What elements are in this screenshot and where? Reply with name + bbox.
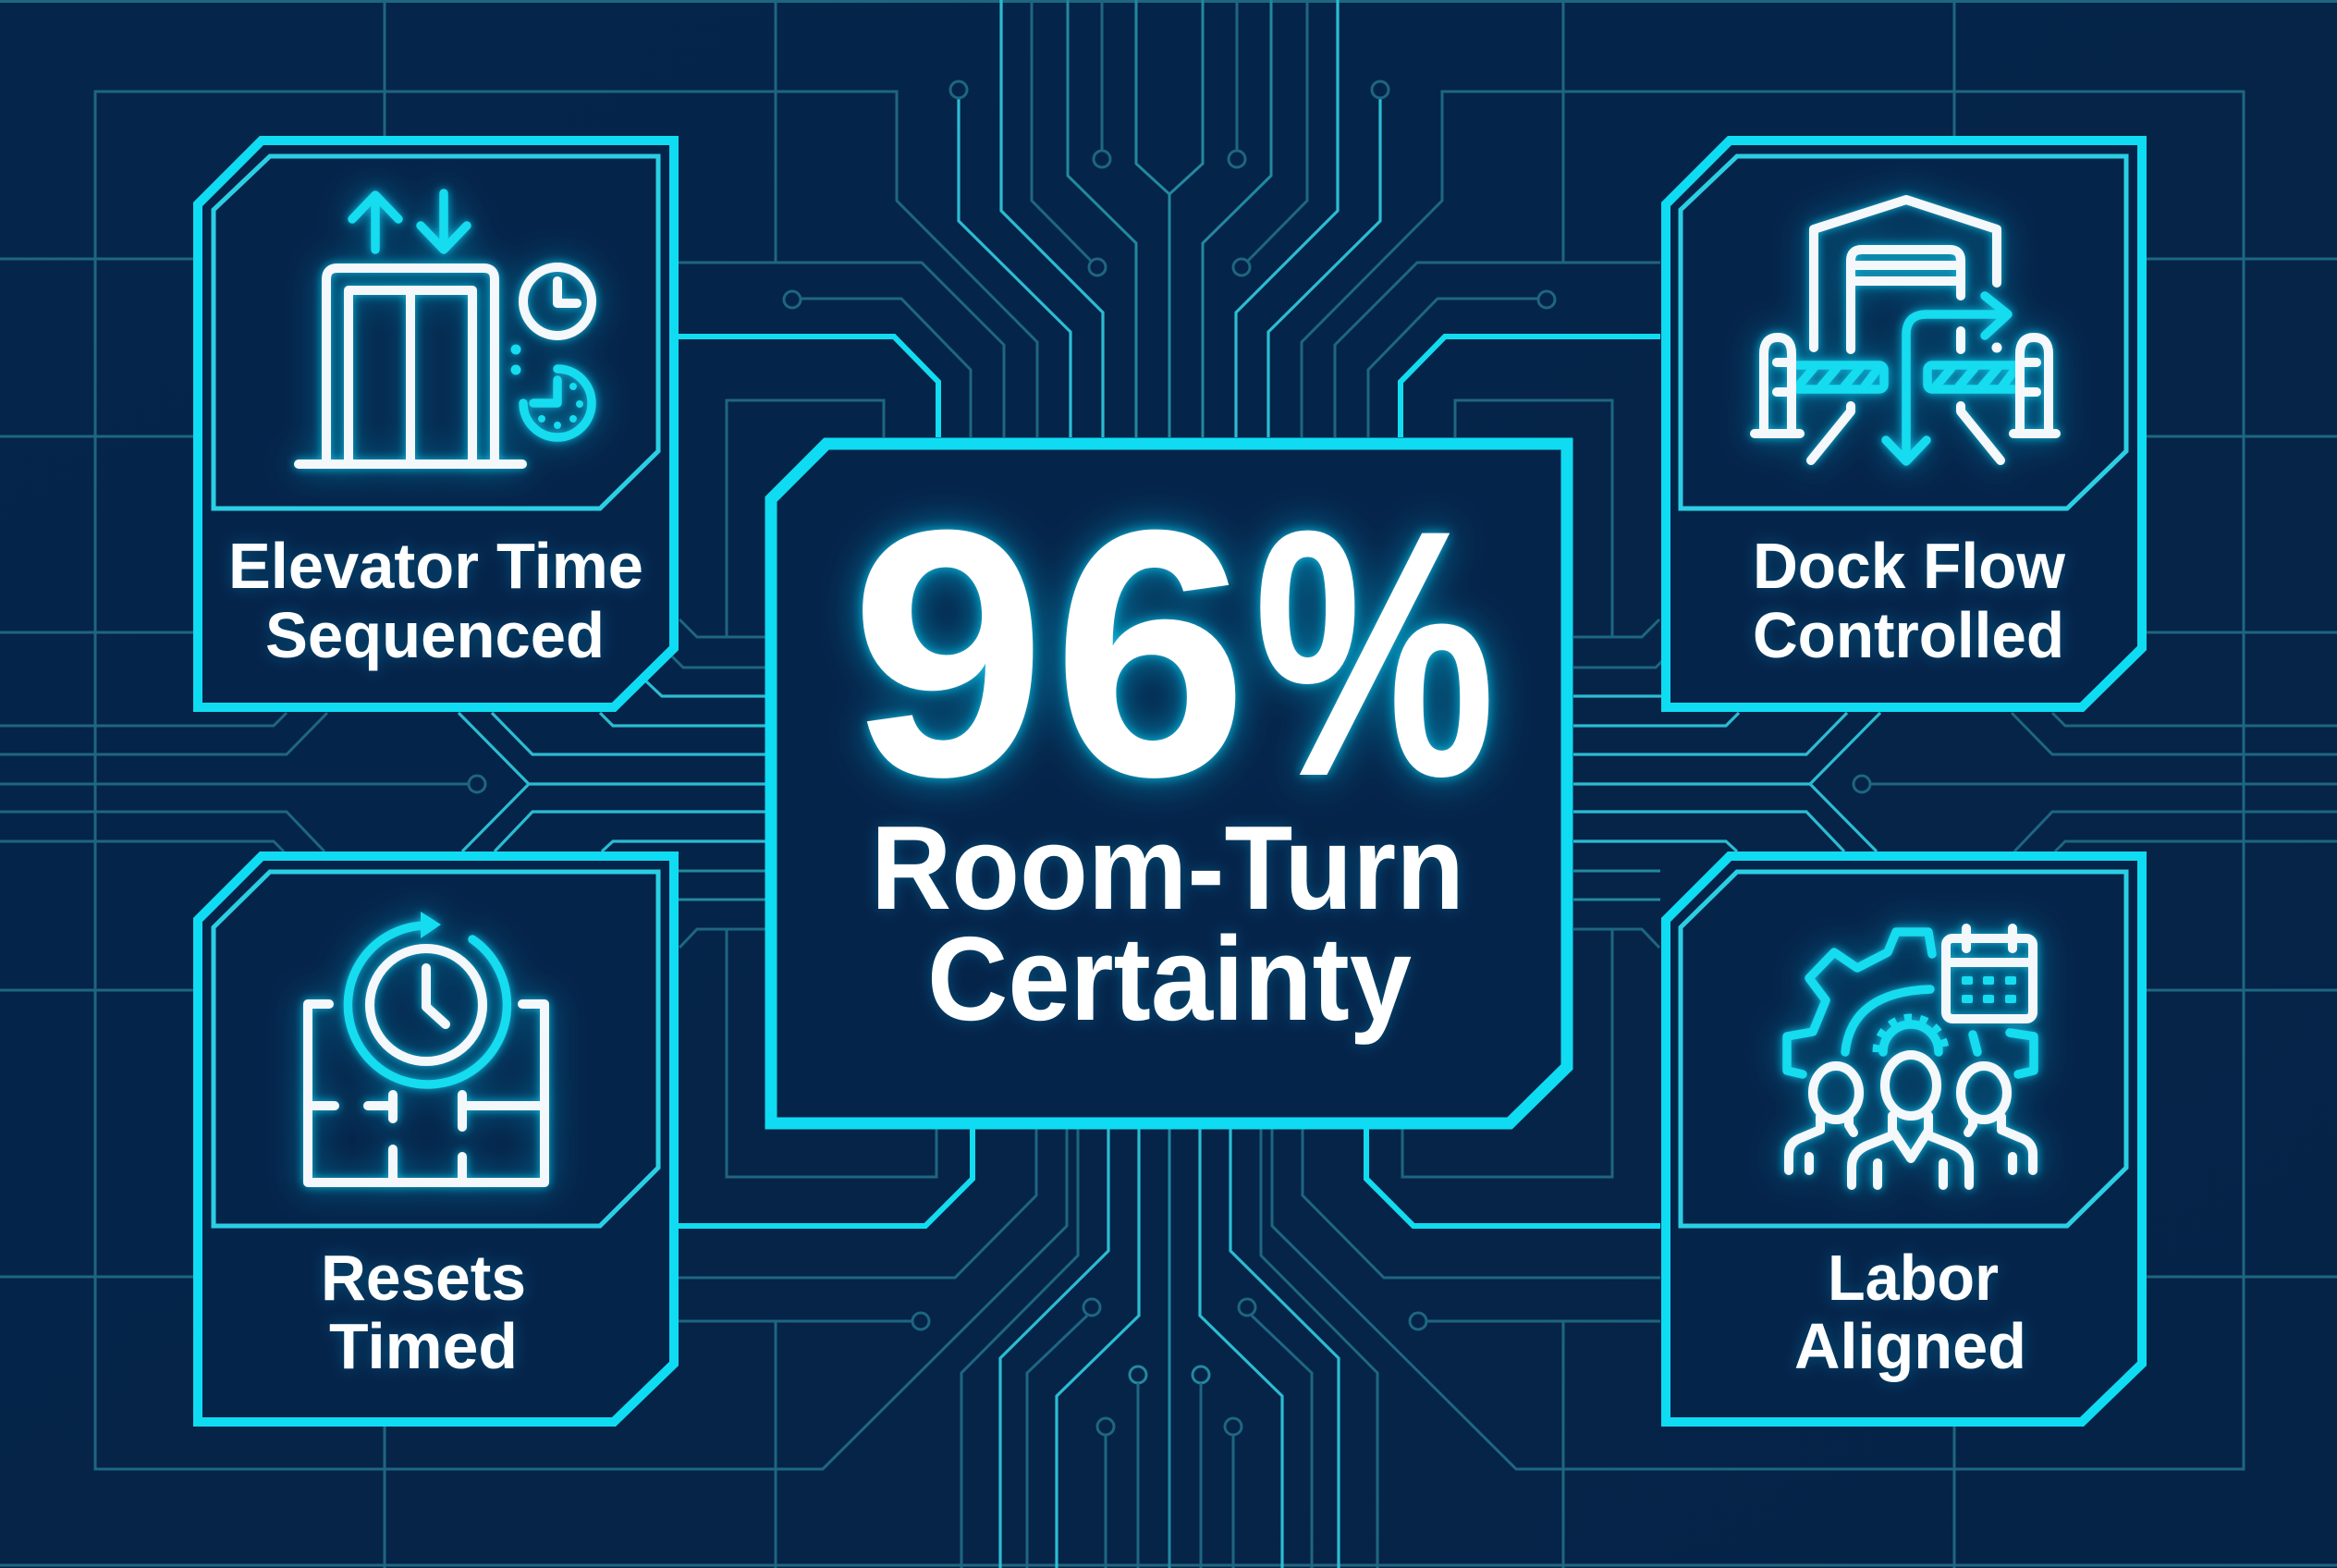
label: dock flow controlled: Controlled — [1753, 599, 2064, 671]
icon: elevator with clocks — [299, 193, 592, 464]
card frame — [1666, 856, 2142, 1422]
icon: floor plan with clock reset — [308, 912, 544, 1182]
metric: 96% — [850, 457, 1496, 850]
inner icon frame — [1681, 872, 2126, 1226]
card frame — [198, 141, 674, 707]
label: elevator time sequenced — [228, 530, 643, 671]
right half traces — [1169, 0, 2337, 1568]
panel: dock flow controlled — [1666, 141, 2142, 707]
card frame — [1666, 141, 2142, 707]
label: labor aligned: Aligned — [1794, 1310, 2026, 1382]
inner icon frame — [214, 156, 658, 508]
label: elevator time sequenced: Sequenced — [265, 599, 605, 671]
card frame — [198, 856, 674, 1422]
center frame — [771, 444, 1567, 1123]
label: labor aligned: Labor — [1828, 1242, 1999, 1314]
label: labor aligned — [1794, 1242, 2026, 1382]
metric: 96%: % — [1254, 457, 1496, 850]
label: elevator time sequenced: Elevator Time — [228, 530, 643, 602]
subtitle: room-turn certainty: Certainty — [927, 913, 1412, 1046]
panel: labor aligned — [1666, 856, 2142, 1422]
icon: team, gear and calendar — [1787, 928, 2034, 1185]
label: resets timed: Resets — [321, 1242, 526, 1314]
subtitle: room-turn certainty: Room-Turn — [871, 802, 1464, 935]
left half traces — [0, 0, 1169, 1568]
inner icon frame — [214, 872, 658, 1226]
panel: resets timed — [198, 856, 674, 1422]
metric: 96%: 96 — [850, 457, 1248, 850]
panel: central metric — [771, 444, 1567, 1123]
panel: elevator time sequenced — [198, 141, 674, 707]
icon: dock with barriers and flow arrows — [1755, 200, 2056, 461]
label: resets timed — [321, 1242, 526, 1382]
subtitle: room-turn certainty — [871, 802, 1464, 1046]
inner icon frame — [1681, 156, 2126, 508]
label: dock flow controlled: Dock Flow — [1753, 530, 2066, 602]
label: dock flow controlled — [1753, 530, 2066, 671]
label: resets timed: Timed — [329, 1310, 518, 1382]
